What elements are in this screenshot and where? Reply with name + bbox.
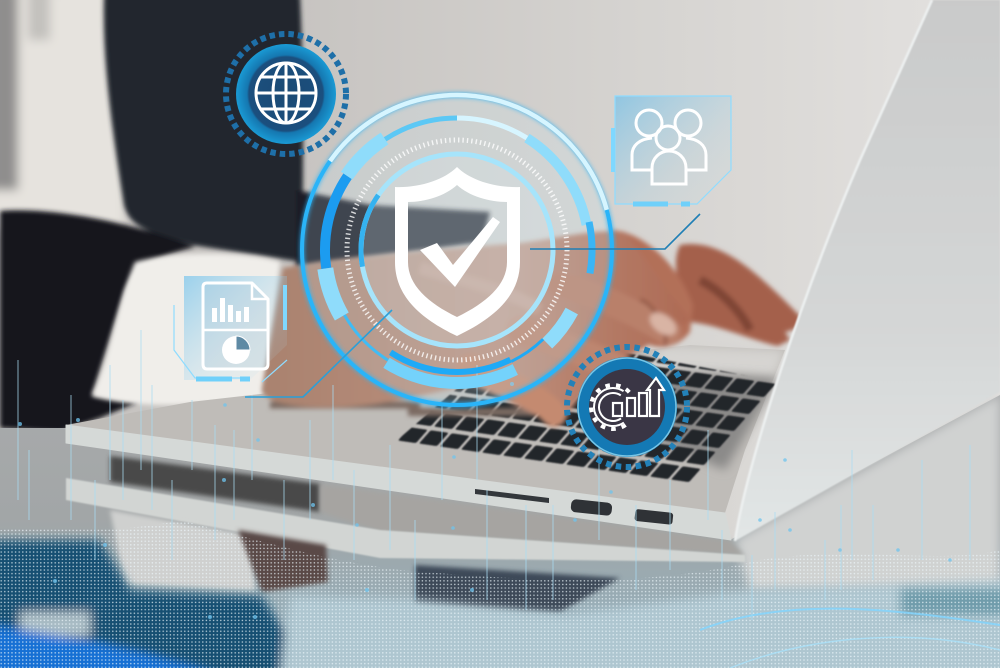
- check mark: [420, 217, 500, 287]
- laptop base: [66, 345, 785, 513]
- icon: document report panel: [174, 276, 287, 382]
- laptop lid: [735, 0, 1000, 541]
- shirt: white shirt torso: [0, 0, 125, 230]
- connector lines: [245, 214, 700, 397]
- data spikes: thin vertical lines: [18, 330, 970, 620]
- table surface: [0, 395, 1000, 668]
- table reflection of laptop: [0, 456, 1000, 668]
- icon: central shield hologram: [241, 34, 673, 466]
- icon: globe badge: [226, 34, 346, 154]
- keyboard: [395, 340, 780, 484]
- shirt cuff: [92, 254, 280, 405]
- hologram rings: [241, 34, 673, 466]
- shield: [395, 167, 520, 336]
- table right section: [735, 395, 1000, 590]
- suit: dark jacket: [0, 0, 490, 432]
- icon: gear and growth chart badge: [567, 347, 687, 467]
- icon: people group panel: [613, 96, 731, 204]
- hands and forearm: [262, 230, 802, 425]
- ports on laptop edge: [475, 489, 673, 525]
- dotted wave at bottom: [0, 520, 1000, 668]
